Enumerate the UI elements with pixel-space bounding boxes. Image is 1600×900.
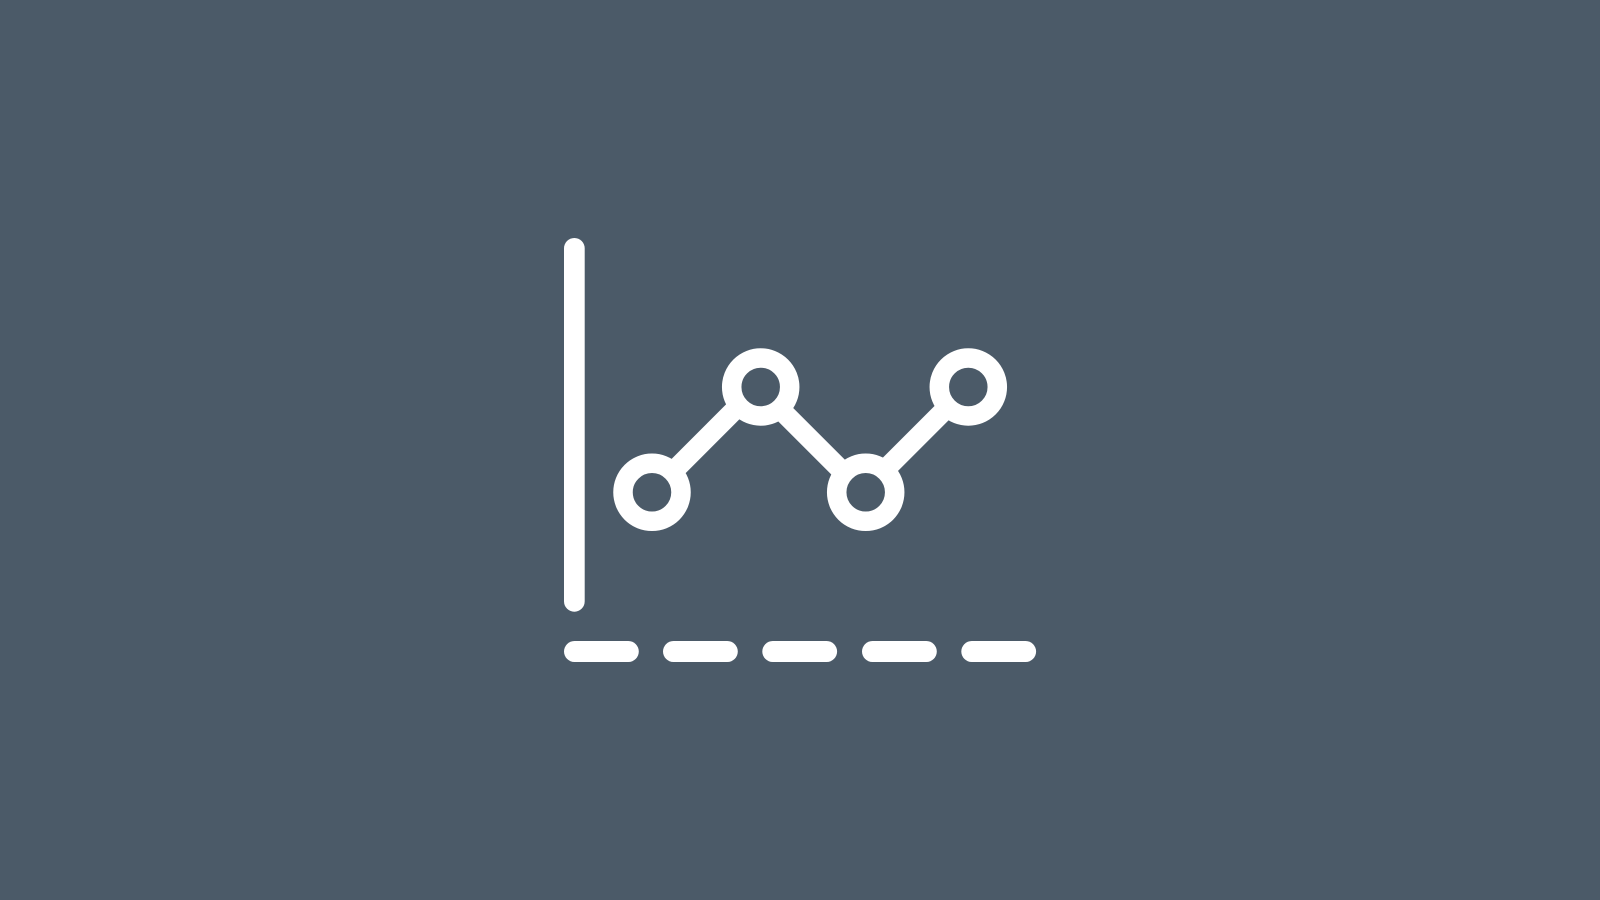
data point markers [623, 358, 997, 521]
x axis dashes [564, 641, 1036, 662]
icon: line chart [564, 238, 1036, 662]
y axis bar [564, 238, 585, 612]
data line segments [675, 409, 945, 470]
